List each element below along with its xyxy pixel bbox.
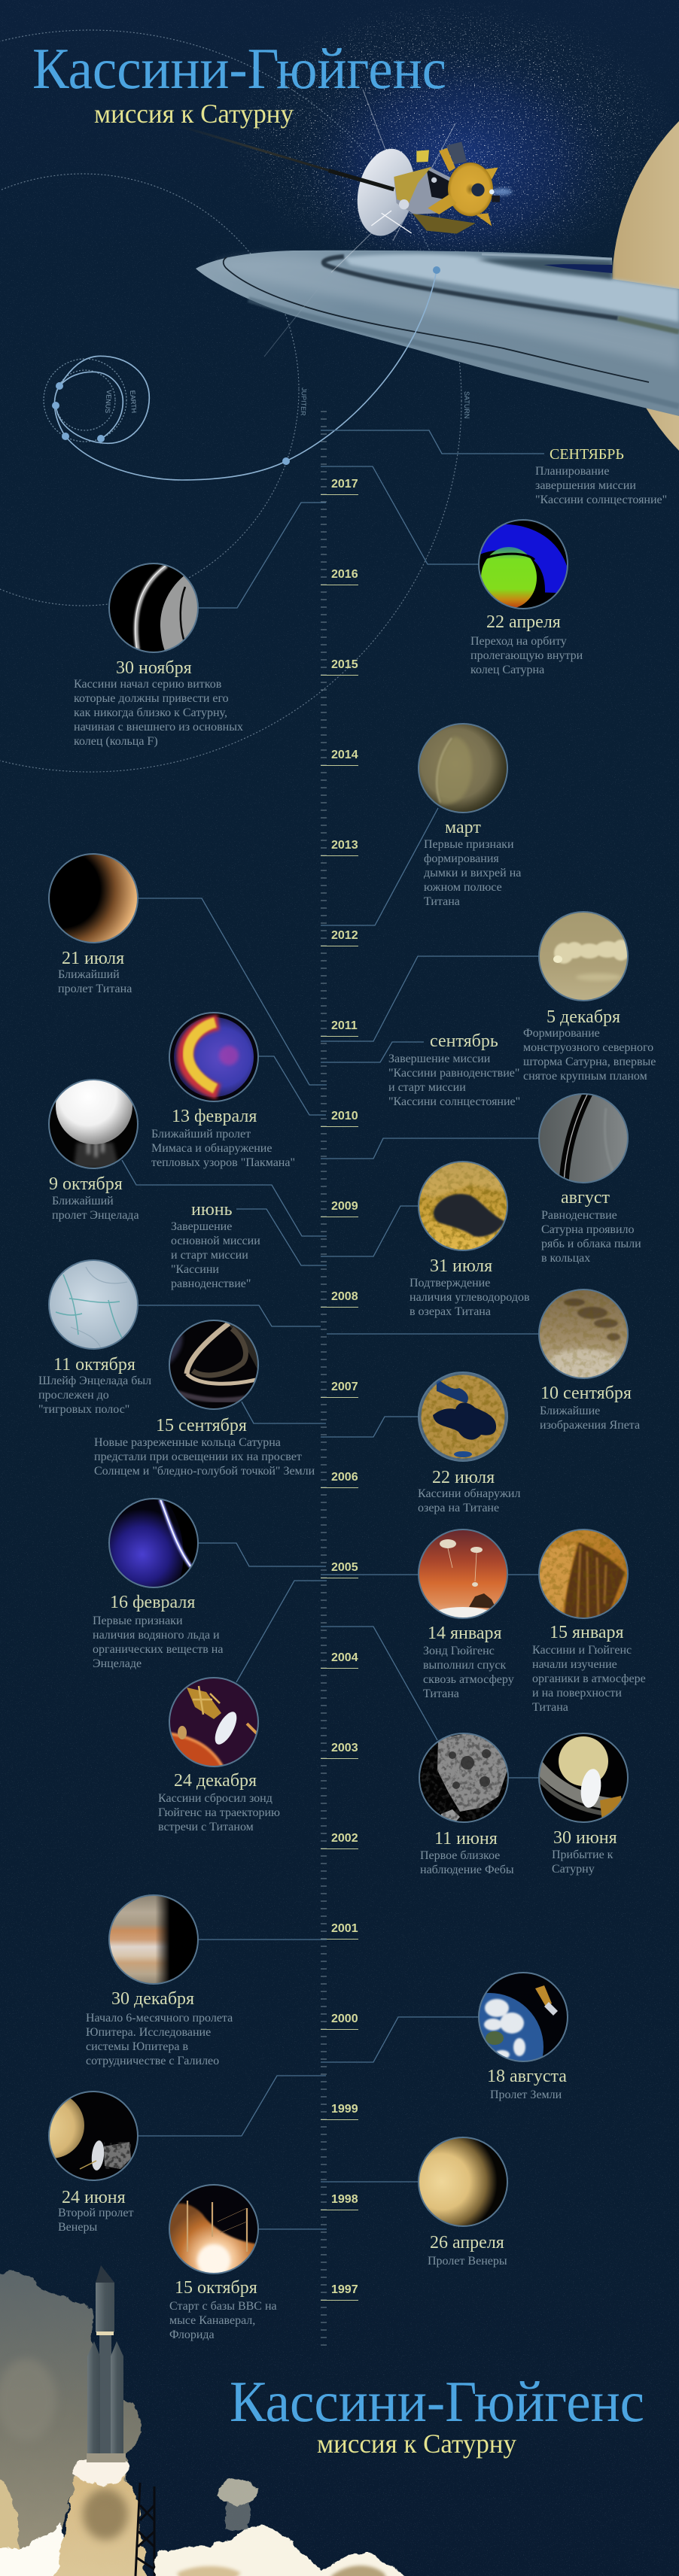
antenna wire <box>331 90 455 272</box>
description: Кассини и Гюйгенс <box>532 1644 632 1657</box>
image: Huygens descent <box>418 1529 508 1625</box>
image: Huygens release <box>169 1677 259 1767</box>
event: июнь 2008 <box>171 1200 327 1290</box>
event: 15 января <box>507 1529 646 1714</box>
description: Второй пролет <box>58 2207 133 2219</box>
description: наличия водяного льда и <box>93 1629 220 1642</box>
image: Venus flyby with Cassini <box>18 2091 139 2181</box>
event: 10 сентября <box>327 1289 640 1432</box>
description: Шлейф Энцелада был <box>38 1375 151 1387</box>
image: Phoebe <box>419 1733 509 1823</box>
image: Titan hydrocarbon lake <box>418 1161 508 1251</box>
steam puff <box>215 2480 257 2529</box>
image: Earth flyby <box>435 1972 568 2101</box>
orange foil ellipse <box>439 148 455 172</box>
connector <box>507 1777 539 1779</box>
event: 21 июля <box>48 853 327 1085</box>
gold lower bay <box>413 214 476 234</box>
description: прослежен до <box>38 1389 109 1402</box>
event: 14 января <box>321 1529 514 1700</box>
image: F ring <box>108 563 206 655</box>
year labels: 1997 <box>331 2283 358 2296</box>
connector <box>138 2076 326 2136</box>
connector <box>507 1574 539 1575</box>
subtitle: миссия к Сатурну <box>94 99 294 129</box>
connector <box>321 1206 419 1256</box>
description: Ближайший <box>58 968 120 981</box>
description: и старт миссии <box>388 1081 466 1094</box>
event: 11 октября <box>38 1259 321 1416</box>
description: сквозь атмосферу <box>423 1673 514 1686</box>
steam cloud bottom <box>154 2527 418 2576</box>
year labels: 2012 <box>331 929 358 942</box>
description: рябь и облака пыли <box>541 1238 641 1250</box>
description: Сатурна проявило <box>541 1223 635 1236</box>
year labels: 2000 <box>331 2012 358 2025</box>
event: сентябрь 2017 <box>321 430 667 506</box>
event: 16 февраля <box>93 1498 326 1670</box>
date: 18 августа <box>487 2067 567 2086</box>
description: Ближайший <box>52 1195 114 1208</box>
description: Титана <box>532 1701 568 1714</box>
connector <box>321 808 438 925</box>
event: 26 апреля <box>321 2137 508 2268</box>
image: northern storm on Saturn <box>538 911 630 1001</box>
orbit: Jupiter dotted <box>0 174 299 606</box>
description: Ближайшие <box>540 1405 600 1417</box>
year labels: 2005 <box>331 1561 358 1574</box>
event: 5 декабря <box>321 911 656 1083</box>
connector <box>242 1402 326 1423</box>
description: Ближайший пролет <box>151 1128 251 1141</box>
description: Пролет Земли <box>490 2088 562 2101</box>
date: 15 января <box>550 1623 624 1642</box>
description: пролет Энцелада <box>52 1209 139 1222</box>
description: Равноденствие <box>541 1209 617 1222</box>
flyby dots <box>52 266 440 465</box>
year lines <box>321 495 358 2301</box>
description: Старт с базы ВВС на <box>169 2300 277 2313</box>
description: наблюдение Фебы <box>420 1864 514 1876</box>
year labels: 2004 <box>331 1651 358 1664</box>
image: Titan south pole <box>418 723 508 813</box>
orbit label: VENUS: VENUS <box>104 390 113 413</box>
connector <box>199 1939 327 1940</box>
connector <box>236 1581 327 1682</box>
timeline axis with year marks <box>321 411 358 2346</box>
description: встречи с Титаном <box>158 1821 254 1833</box>
description: выполнил спуск <box>423 1659 507 1672</box>
description: Переход на орбиту <box>470 635 567 648</box>
date: июнь <box>191 1200 233 1220</box>
event: март <box>321 723 521 925</box>
date: 11 июня <box>434 1829 498 1848</box>
description: "Кассини солнцестояние" <box>535 494 667 506</box>
orbit: Venus dotted <box>55 370 115 430</box>
connector <box>122 1160 327 1236</box>
launch tower <box>135 2483 154 2576</box>
description: Первое близкое <box>420 1849 500 1862</box>
exhaust flame <box>73 2457 130 2484</box>
trajectory: solid flight path <box>52 266 440 480</box>
year labels: 2013 <box>331 839 358 852</box>
description: озера на Титане <box>418 1502 499 1514</box>
event: 11 июня <box>321 1627 514 1876</box>
description: мысе Канаверал, <box>169 2314 255 2327</box>
description: Завершение миссии <box>388 1053 491 1065</box>
event: 13 февраля <box>151 1012 326 1169</box>
year labels <box>331 478 358 2296</box>
event: 9 октября <box>48 1068 327 1236</box>
rocket <box>87 2265 126 2462</box>
year labels: 2014 <box>331 749 358 761</box>
illustration: Saturn planet and rings <box>196 50 679 522</box>
year labels: 2016 <box>331 568 358 581</box>
event: 24 декабря <box>158 1581 327 1833</box>
date: 21 июля <box>62 949 124 968</box>
date: 30 июня <box>553 1828 617 1848</box>
connector <box>258 1056 326 1115</box>
connector <box>321 430 544 454</box>
connector <box>321 466 479 564</box>
image: Titan lakes map <box>418 1372 508 1462</box>
description: Завершение <box>171 1220 232 1233</box>
description: предстали при освещении их на просвет <box>94 1451 302 1463</box>
solar panel boom <box>446 141 467 164</box>
description: Титана <box>424 895 460 908</box>
connector <box>198 503 326 608</box>
year labels: 2008 <box>331 1290 358 1303</box>
connector <box>139 898 327 1085</box>
date: 5 декабря <box>547 1007 620 1027</box>
event: 30 ноября <box>74 503 326 748</box>
date: 15 октября <box>175 2278 257 2298</box>
description: "Кассини равноденствие" <box>388 1067 519 1080</box>
date: 30 декабря <box>111 1989 194 2009</box>
connector <box>321 956 539 1041</box>
description: сотрудничестве с Галилео <box>86 2055 219 2067</box>
description: Формирование <box>523 1027 600 1040</box>
description: системы Юпитера в <box>86 2040 188 2053</box>
Saturn globe <box>612 50 679 522</box>
description: южном полюсе <box>424 881 502 894</box>
year labels: 1998 <box>331 2193 358 2206</box>
image: arrival at Saturn <box>537 1733 630 1823</box>
description: монструозного северного <box>523 1041 653 1054</box>
description: равноденствие" <box>171 1277 251 1290</box>
description: колец Сатурна <box>470 664 544 676</box>
year labels: 2006 <box>331 1471 358 1484</box>
year labels: 2001 <box>331 1922 358 1935</box>
connector <box>321 1627 437 1740</box>
smoke cloud grey <box>0 2271 140 2565</box>
event: 22 апреля <box>321 466 583 676</box>
smoke cloud tan <box>0 2468 19 2558</box>
high gain dish <box>350 144 422 242</box>
description: Кассини обнаружил <box>418 1487 520 1500</box>
description: начали изучение <box>532 1658 617 1671</box>
description: Первые признаки <box>424 838 514 851</box>
connector <box>321 1417 419 1437</box>
white steam left <box>0 2524 79 2576</box>
date: 13 февраля <box>172 1107 257 1126</box>
connector <box>321 2017 479 2062</box>
bottom subtitle: миссия к Сатурну <box>317 2429 516 2459</box>
event: сентябрь 2010 <box>321 1031 520 1108</box>
description: которые должны привести его <box>74 692 229 705</box>
date: март <box>445 818 481 837</box>
image: Iapetus <box>538 1289 629 1379</box>
description: "Кассини <box>171 1263 219 1276</box>
ring system <box>196 251 679 416</box>
image: Enceladus tiger stripes <box>48 1259 139 1350</box>
image: Mimas thermal Pacman <box>169 1012 259 1102</box>
orbit label: JUPITER: JUPITER <box>300 387 308 416</box>
date: август <box>561 1188 610 1208</box>
year labels: 2011 <box>331 1019 358 1032</box>
connector <box>139 1305 321 1326</box>
orbit label: EARTH: EARTH <box>129 390 138 413</box>
description: органики в атмосфере <box>532 1672 646 1685</box>
connector <box>258 2228 327 2230</box>
description: Зонд Гюйгенс <box>423 1645 495 1657</box>
tick marks <box>321 411 327 2346</box>
chart: orbit map with trajectory <box>0 30 470 772</box>
description: как никогда близко к Сатурну, <box>74 706 227 719</box>
description: начиная с внешнего из основных <box>74 721 243 734</box>
event: 30 декабря <box>86 1894 327 2067</box>
event: 18 августа <box>321 1972 568 2101</box>
engine glow <box>492 188 512 196</box>
description: "Кассини солнцестояние" <box>388 1095 520 1108</box>
image: ring orbit colour map <box>478 519 568 609</box>
description: органических веществ на <box>93 1643 223 1656</box>
description: снятое крупным планом <box>523 1070 647 1083</box>
exhaust plume <box>53 2454 147 2576</box>
connector <box>199 1543 326 1566</box>
description: Флорида <box>169 2328 215 2341</box>
illustration: Cassini spacecraft <box>173 90 512 357</box>
year labels: 2009 <box>331 1200 358 1213</box>
image: Titan surface <box>538 1529 629 1621</box>
description: Кассини сбросил зонд <box>158 1792 273 1805</box>
year labels: 1999 <box>331 2103 358 2116</box>
year labels: 2010 <box>331 1110 358 1122</box>
image: Titan crescent <box>48 853 139 943</box>
description: Начало 6-месячного пролета <box>86 2012 233 2025</box>
description: Подтверждение <box>410 1277 490 1290</box>
magnetometer boom <box>173 124 381 186</box>
date: 10 сентября <box>540 1384 632 1403</box>
image: Enceladus plume <box>48 1079 139 1169</box>
orbit label: SATURN: SATURN <box>463 391 470 418</box>
orbit: Saturn dotted <box>0 30 461 772</box>
description: колец (кольца F) <box>74 735 158 748</box>
description: Прибытие к <box>552 1848 614 1861</box>
image: Enceladus blue limb <box>97 1498 199 1599</box>
connector <box>327 1333 539 1335</box>
event: 15 сентября <box>94 1320 326 1478</box>
connector <box>321 1138 539 1159</box>
connector <box>236 1209 327 1265</box>
description: дымки и вихрей на <box>424 867 521 879</box>
date: 15 сентября <box>156 1416 247 1435</box>
description: тепловых узоров "Пакмана" <box>151 1156 295 1169</box>
date: 30 ноября <box>116 658 192 678</box>
date: 24 декабря <box>174 1771 257 1791</box>
orbit: Earth dotted <box>44 359 126 442</box>
description: Пролет Венеры <box>428 2255 507 2268</box>
description: наличия углеводородов <box>410 1291 530 1304</box>
description: Первые признаки <box>93 1615 183 1627</box>
date: 9 октября <box>49 1174 123 1194</box>
title: Кассини-Гюйгенс <box>32 36 446 101</box>
description: Энцеладе <box>93 1657 142 1670</box>
description: и старт миссии <box>171 1249 248 1262</box>
description: Титана <box>423 1687 459 1700</box>
event: август <box>321 1093 641 1265</box>
description: Мимаса и обнаружение <box>151 1142 272 1155</box>
connector <box>321 2181 419 2183</box>
description: Планирование <box>535 465 609 478</box>
body silver <box>394 168 457 214</box>
description: основной миссии <box>171 1235 260 1247</box>
event: 24 июня <box>18 2076 326 2234</box>
description: Солнцем и "бледно-голубой точкой" Земли <box>94 1465 315 1478</box>
date: 26 апреля <box>430 2233 504 2252</box>
date: 14 января <box>428 1624 502 1643</box>
illustration: rocket launch and clouds <box>0 2265 418 2576</box>
description: Сатурну <box>552 1863 595 1876</box>
image: launch from Cape Canaveral <box>169 2184 259 2277</box>
event: 22 июля <box>321 1372 520 1514</box>
description: Юпитера. Исследование <box>86 2026 211 2039</box>
date: 24 июня <box>62 2188 126 2207</box>
description: завершения миссии <box>535 479 636 492</box>
date: сентябрь <box>430 1031 498 1051</box>
year labels: 2015 <box>331 658 358 671</box>
description: "тигровых полос" <box>38 1403 129 1416</box>
image: ring equinox ripples <box>538 1093 629 1183</box>
description: Гюйгенс на траекторию <box>158 1806 280 1819</box>
description: Новые разреженные кольца Сатурна <box>94 1436 281 1449</box>
year labels: 2003 <box>331 1742 358 1754</box>
description: изображения Япета <box>540 1419 640 1432</box>
description: Венеры <box>58 2221 97 2234</box>
date: 16 февраля <box>110 1593 195 1612</box>
description: формирования <box>424 852 499 865</box>
description: Кассини начал серию витков <box>74 678 222 691</box>
connector <box>321 1574 419 1575</box>
description: пролегающую внутри <box>470 649 583 662</box>
description: шторма Сатурна, впервые <box>523 1056 656 1068</box>
event: 15 октября <box>169 2184 327 2341</box>
event: 31 июля <box>321 1161 530 1318</box>
bottom title: Кассини-Гюйгенс <box>230 2369 644 2434</box>
connector <box>321 1042 424 1062</box>
image: Jupiter <box>108 1894 199 1985</box>
date: СЕНТЯБРЬ <box>550 446 624 463</box>
description: и на поверхности <box>532 1687 622 1700</box>
year labels: 2007 <box>331 1381 358 1393</box>
description: пролет Титана <box>58 983 132 995</box>
date: 31 июля <box>430 1256 492 1276</box>
year labels: 2002 <box>331 1832 358 1845</box>
image: Venus <box>418 2137 508 2227</box>
date: 22 июля <box>432 1468 495 1487</box>
image: backlit Saturn rings <box>169 1320 259 1410</box>
year labels: 2017 <box>331 478 358 491</box>
date: 11 октября <box>53 1355 135 1375</box>
description: в кольцах <box>541 1252 590 1265</box>
event: 30 июня <box>507 1733 630 1876</box>
description: в озерах Титана <box>410 1305 491 1318</box>
date: 22 апреля <box>486 612 561 632</box>
